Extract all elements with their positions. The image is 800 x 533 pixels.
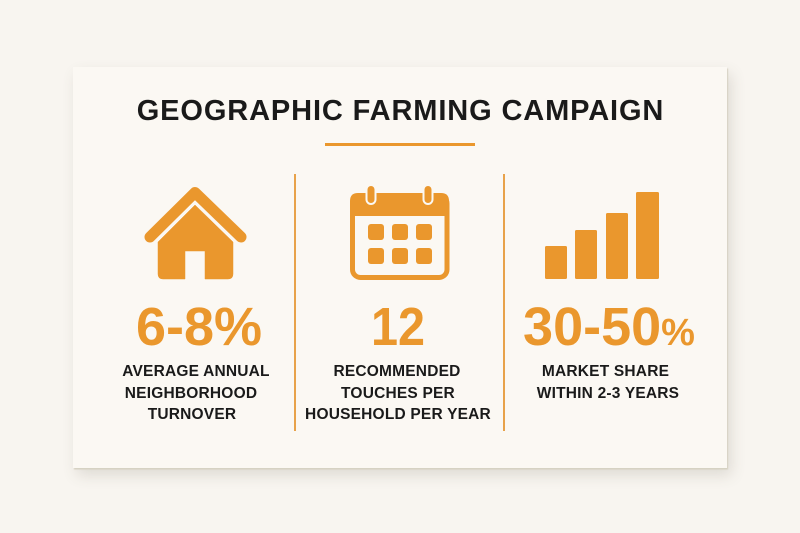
label: turnover: TURNOVER bbox=[148, 406, 236, 423]
icon: house bbox=[144, 187, 246, 280]
label: turnover bbox=[122, 363, 270, 423]
label: market share bbox=[536, 363, 679, 402]
label: turnover: NEIGHBORHOOD bbox=[125, 384, 257, 402]
icon: rising bar chart bbox=[545, 192, 659, 279]
panel: campaign card bbox=[73, 67, 727, 468]
stat: 12: 12 bbox=[371, 297, 425, 357]
stat: 6-8%: 6-8% bbox=[136, 297, 262, 357]
title: GEOGRAPHIC FARMING CAMPAIGN bbox=[137, 95, 664, 127]
label: touches: TOUCHES PER bbox=[341, 384, 455, 402]
column divider right bbox=[503, 174, 505, 431]
label: market share: WITHIN 2-3 YEARS bbox=[537, 384, 679, 402]
label: touches bbox=[305, 363, 491, 423]
icon: calendar bbox=[350, 186, 450, 280]
label: touches: RECOMMENDED bbox=[333, 363, 461, 380]
label: touches: HOUSEHOLD PER YEAR bbox=[305, 406, 491, 423]
label: turnover: AVERAGE ANNUAL bbox=[122, 363, 270, 380]
label: market share: MARKET SHARE bbox=[542, 363, 669, 380]
stat: 30-50%: 30-50% bbox=[523, 297, 695, 357]
title underline bbox=[325, 143, 475, 146]
column divider left bbox=[294, 174, 296, 431]
